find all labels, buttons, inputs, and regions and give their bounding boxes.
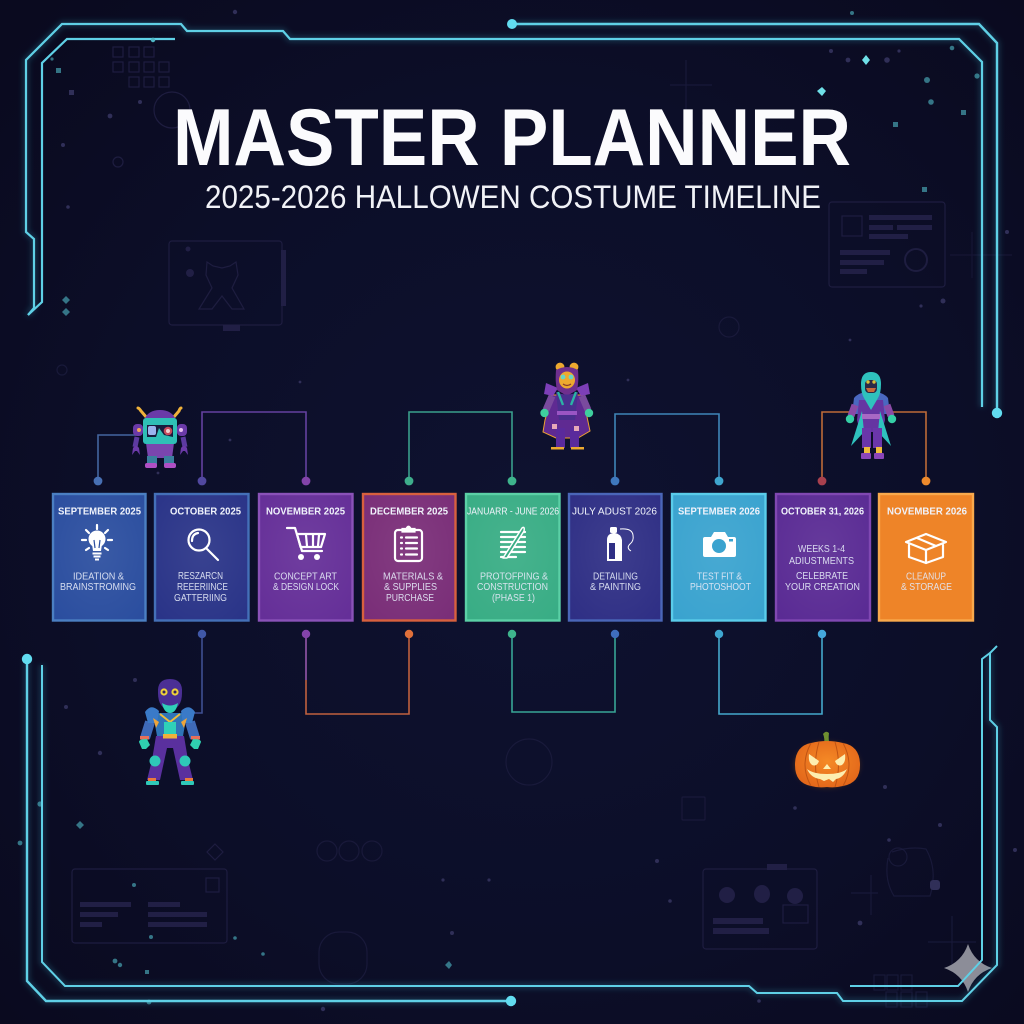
connector: July to September 2026 bbox=[611, 414, 723, 485]
card: October 2025: REEERIINCE bbox=[177, 581, 228, 593]
card: October 2025 bbox=[155, 494, 248, 620]
frame: bottom and right lines bbox=[42, 646, 997, 1001]
frame: top-left corner bbox=[26, 24, 982, 407]
icon: light bulb bbox=[82, 525, 112, 560]
faint background panel: costume sketch bbox=[169, 241, 286, 331]
subtitle: 2025-2026 HALLOWEN COSTUME TIMELINE bbox=[205, 179, 821, 215]
pumpkin bbox=[795, 732, 860, 787]
icon: camera bbox=[703, 532, 736, 557]
card: December 2025: & SUPPLIES bbox=[384, 581, 437, 593]
icon: needle and pattern bbox=[501, 527, 525, 558]
card: September 2026: SEPTEMBER 2026 bbox=[678, 506, 760, 518]
card: September 2025 bbox=[53, 494, 146, 620]
card: October 31, 2026: YOUR CREATION bbox=[785, 581, 860, 593]
card: September 2025: BRAINSTROMING bbox=[60, 581, 136, 593]
connector: November to December 2025 lower bbox=[302, 630, 413, 714]
card: September 2026: TEST FIT & bbox=[697, 570, 742, 582]
card: July to August 2026: DETAILING bbox=[593, 570, 638, 582]
card: October 31, 2026: ADIUSTMENTS bbox=[789, 555, 854, 567]
frame: top-right line with node bbox=[507, 19, 1002, 418]
card: December 2025: PURCHASE bbox=[386, 592, 434, 604]
faint background panel: top-left grid bbox=[113, 47, 190, 167]
card: January to June 2026: JANUARR - JUNE 2026 bbox=[467, 506, 559, 518]
card: December 2025 bbox=[363, 494, 456, 620]
card: October 2025: RESZARCN bbox=[178, 570, 223, 582]
faint background panel: top-right card bbox=[829, 202, 1012, 287]
icon: storage box bbox=[906, 534, 946, 563]
card: October 31, 2026 bbox=[776, 494, 870, 620]
connector: December 2025 to January 2026 bbox=[405, 412, 516, 485]
character: robot bbox=[132, 408, 188, 468]
card: January to June 2026: CONSTRUCTION bbox=[477, 581, 548, 593]
icon: shopping cart bbox=[287, 528, 325, 560]
icon: spray can bbox=[607, 527, 633, 561]
character: teal hooded figure bbox=[846, 372, 896, 459]
card: November 2026: NOVEMBER 2026 bbox=[887, 506, 967, 518]
character: caped hero bbox=[540, 363, 593, 450]
card: September 2026 bbox=[672, 494, 766, 620]
card: October 31, 2026: CELEBRATE bbox=[796, 570, 848, 582]
icon: magnifying glass bbox=[188, 530, 218, 560]
card: October 31, 2026: OCTOBER 31, 2026 bbox=[781, 506, 864, 518]
card: November 2026: CLEANUP bbox=[906, 570, 946, 582]
connector: October to November 2025 bbox=[198, 412, 310, 485]
character: armored explorer bbox=[139, 679, 201, 785]
card: January to June 2026: (PHASE 1) bbox=[492, 592, 535, 604]
connector: September to October 2026 lower bbox=[715, 630, 826, 714]
connector: October 2025 down to explorer bbox=[190, 630, 206, 713]
connector: January to July 2026 lower bbox=[508, 630, 619, 712]
faint background panel: bottom-left card bbox=[72, 844, 227, 943]
card: October 2025: OCTOBER 2025 bbox=[170, 506, 241, 518]
card: November 2025 bbox=[259, 494, 352, 620]
card: October 2025: GATTERIING bbox=[174, 592, 227, 604]
card: September 2025: IDEATION & bbox=[73, 570, 124, 582]
card: January to June 2026: PROTOFPING & bbox=[480, 570, 548, 582]
connector: October 31 to November 2026 bbox=[818, 412, 930, 485]
icon: clipboard checklist bbox=[395, 526, 422, 561]
frame: bottom-left line with nodes bbox=[22, 654, 516, 1006]
card: January to June 2026 bbox=[466, 494, 560, 620]
title: MASTER PLANNER bbox=[173, 93, 851, 183]
card: July to August 2026: JULY ADUST 2026 bbox=[572, 506, 657, 518]
faint background panel: bottom-right card bbox=[703, 864, 817, 949]
card: November 2025: NOVEMBER 2025 bbox=[266, 506, 345, 518]
card: July to August 2026 bbox=[569, 494, 662, 620]
card: December 2025: MATERIALS & bbox=[383, 570, 443, 582]
card: November 2026: & STORAGE bbox=[901, 581, 952, 593]
connector: September 2025 to robot bbox=[94, 435, 136, 485]
card: September 2025: SEPTEMBER 2025 bbox=[58, 506, 141, 518]
sparkle watermark bbox=[944, 944, 992, 992]
card: November 2025: CONCEPT ART bbox=[274, 570, 337, 582]
card: December 2025: DECEMBER 2025 bbox=[370, 506, 448, 518]
card: July to August 2026: & PAINTING bbox=[590, 581, 641, 593]
card: September 2026: PHOTOSHOOT bbox=[690, 581, 751, 593]
card: November 2025: & DESIGN LOCK bbox=[273, 581, 339, 593]
card: November 2026 bbox=[879, 494, 973, 620]
card: October 31, 2026: WEEKS 1-4 bbox=[798, 543, 845, 555]
